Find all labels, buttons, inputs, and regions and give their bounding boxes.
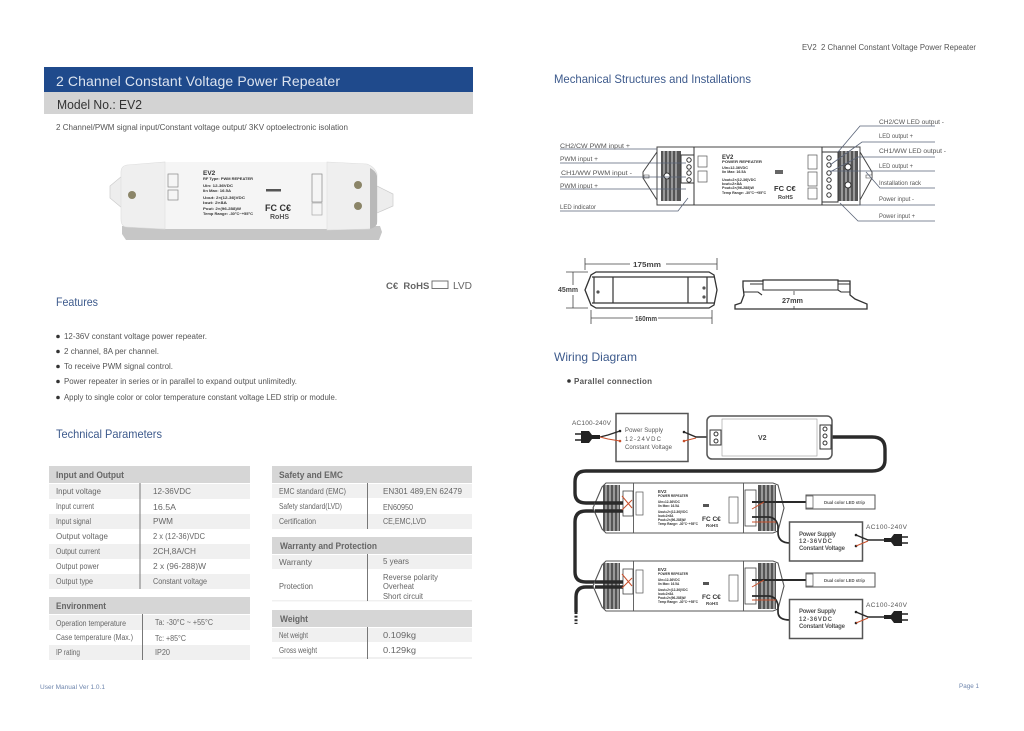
callout: LED indicator: LED indicator	[560, 204, 597, 211]
table: input and output	[49, 466, 250, 589]
certification marks: LVD	[453, 281, 472, 292]
table: input and output: Input signal	[56, 517, 91, 526]
product photo: Iin Max: 16.5A	[203, 189, 232, 193]
repeater: lower	[593, 561, 784, 611]
table: weight: Weight	[280, 614, 308, 624]
driver outline: POWER REPEATER	[722, 160, 763, 164]
repeater: upper: Temp Range: -30°C~+55°C	[658, 522, 699, 526]
table: input and output: Output voltage	[56, 532, 109, 541]
table: warranty and protection: 5 years	[383, 557, 409, 566]
heading: wiring diagram: Wiring Diagram	[554, 350, 637, 364]
table: input and output: Output current	[56, 547, 101, 556]
repeater: lower: Iin Max: 16.5A	[658, 582, 680, 586]
icon: power plug top left	[575, 431, 600, 443]
repeater: lower: RoHS	[706, 601, 718, 606]
diagram: top view dimensions: 45mm	[558, 285, 578, 294]
LED strip: lower	[806, 573, 875, 587]
LED output cables	[752, 502, 806, 580]
heading: technical parameters: Technical Parameters	[56, 427, 162, 441]
repeater: lower: POWER REPEATER	[658, 572, 689, 576]
repeater: upper: POWER REPEATER	[658, 494, 689, 498]
power supply: upper right: Constant Voltage	[799, 546, 846, 552]
table: safety and EMC: Safety standard(LVD)	[279, 502, 342, 511]
table: environment: Operation temperature	[56, 619, 126, 628]
AC label: lower right: AC100-240V	[866, 602, 908, 609]
table: warranty and protection	[272, 537, 472, 602]
callout: power input +: Power input +	[879, 213, 915, 220]
power supply: top: Power Supply	[625, 428, 663, 434]
repeater: lower: Temp Range: -30°C~+55°C	[658, 600, 699, 604]
footer: version: User Manual Ver 1.0.1	[40, 684, 105, 691]
product photo: Iout: 2×8A	[203, 201, 228, 205]
right callout lines	[830, 126, 935, 221]
table: environment: IP rating	[56, 648, 80, 657]
table: input and output: Input current	[56, 502, 95, 511]
title banner: 2 Channel Constant Voltage Power Repeater	[56, 73, 340, 89]
table: safety and EMC: CE,EMC,LVD	[383, 517, 426, 526]
product photo: Uin: 12-36VDC	[203, 184, 234, 188]
table: weight: 0.129kg	[383, 646, 416, 655]
driver outline: Iin Max: 16.5A	[722, 170, 747, 174]
features list	[56, 332, 337, 402]
diagram: side view dimensions	[735, 280, 867, 309]
repeater: lower: Uout=2×(12-36)VDC	[658, 588, 688, 592]
callout: LED output + second: LED output +	[879, 163, 913, 170]
features list: Apply to single color or color temperature constant voltage LED strip or module.	[64, 393, 337, 402]
table: warranty and protection: Overheat	[383, 582, 415, 591]
driver outline: Uout=2×(12-36)VDC	[722, 178, 757, 182]
input wire ends	[595, 503, 623, 587]
features list: 2 channel, 8A per channel.	[64, 347, 159, 356]
product photo: EV2	[203, 170, 216, 177]
red wires	[622, 496, 776, 600]
features list: To receive PWM signal control.	[64, 362, 173, 371]
power supply cables	[752, 517, 790, 620]
table: safety and EMC: EN301 489,EN 62479	[383, 487, 463, 496]
table: safety and EMC: EN60950	[383, 503, 413, 512]
table: safety and EMC	[272, 466, 472, 529]
icon: power plug lower right	[856, 611, 908, 623]
model number bar: Model No.: EV2	[57, 97, 142, 112]
repeater: upper: Uout=2×(12-36)VDC	[658, 510, 688, 514]
table: weight: Gross weight	[279, 646, 318, 655]
table: input and output: 16.5A	[153, 503, 177, 512]
power supply: upper right	[790, 522, 862, 561]
controller: V2	[707, 416, 832, 459]
diagram: top view dimensions	[558, 258, 717, 324]
table: environment: Environment	[56, 601, 106, 611]
callout: PWM input +: PWM input +	[560, 156, 598, 163]
callout: CH2/CW LED output -: CH2/CW LED output -	[879, 119, 944, 126]
power supply: top: 12-24VDC	[625, 437, 662, 443]
repeater: lower: EV2	[658, 567, 667, 572]
table: input and output: 12-36VDC	[153, 487, 191, 496]
features list: Power repeater in series or in parallel to expand output unlimitedly.	[64, 377, 297, 386]
footer: page number: Page 1	[959, 683, 979, 690]
power supply: lower right: Constant Voltage	[799, 624, 846, 630]
diagram: parallel wiring	[572, 414, 908, 638]
product photo: RF Type: PWM REPEATER	[203, 177, 254, 181]
LED strip: upper	[806, 495, 875, 509]
sub-heading: parallel connection: Parallel connection	[574, 377, 652, 386]
repeater: upper: Iout=2×8A	[658, 514, 674, 518]
table: input and output: Input voltage	[56, 487, 102, 496]
callout: CH2/CW PWM input +: CH2/CW PWM input +	[560, 143, 630, 150]
diagram: top view dimensions: 160mm	[635, 314, 657, 323]
table: input and output: 2CH,8A/CH	[153, 547, 196, 556]
table: environment: IP20	[155, 648, 170, 657]
table: input and output: 2 x (96-288)W	[153, 562, 206, 571]
table: input and output: PWM	[153, 517, 173, 526]
dashed continuation	[574, 612, 578, 624]
product photo: Uout: 2×(12-36)VDC	[203, 196, 246, 200]
repeater: lower: Iout=2×8A	[658, 592, 674, 596]
product photo: FC C€	[265, 203, 291, 213]
repeater: upper: FC C€	[702, 516, 721, 523]
repeater: lower: Pout=2×(96-288)W	[658, 596, 686, 600]
repeater: upper: Iin Max: 16.5A	[658, 504, 680, 508]
heading: features: Features	[56, 295, 98, 309]
table: warranty and protection: Warranty and Protection	[280, 541, 377, 551]
repeater: lower: FC C€	[702, 594, 721, 601]
driver outline: Temp Range: -30°C~+55°C	[722, 191, 767, 195]
power supply: lower right	[790, 600, 862, 638]
repeater: upper: RoHS	[706, 523, 718, 528]
repeater: upper: Uin=12-36VDC	[658, 500, 681, 504]
table: safety and EMC: Certification	[279, 517, 316, 526]
AC label: upper right: AC100-240V	[866, 524, 908, 531]
signal cables	[575, 437, 885, 612]
driver outline: Pout=2×(96-288)W	[722, 186, 754, 190]
power supply: lower right: Power Supply	[799, 609, 837, 615]
diagram: side view dimensions: 27mm	[782, 296, 803, 305]
repeater: lower: Uin=12-36VDC	[658, 578, 681, 582]
callout: LED output +: LED output +	[879, 133, 913, 140]
title banner	[44, 67, 473, 92]
table: input and output: Output power	[56, 562, 99, 571]
running header: EV2 2 Channel Constant Voltage Power Repeater	[802, 43, 976, 52]
driver outline: Uin=12-36VDC	[722, 166, 749, 170]
table: input and output: 2 x (12-36)VDC	[153, 532, 205, 541]
AC label: top left: AC100-240V	[572, 420, 612, 427]
table: warranty and protection: Short circuit	[383, 592, 424, 601]
repeater: upper	[593, 483, 784, 533]
heading: mechanical structures: Mechanical Structures and Installations	[554, 72, 751, 86]
driver outline	[643, 147, 872, 205]
product photo: Pout: 2×(96-288)W	[203, 207, 241, 211]
product photo	[110, 162, 393, 240]
callout: PWM input + second: PWM input +	[560, 183, 598, 190]
left callout lines	[560, 149, 688, 211]
table: warranty and protection: Reverse polarity	[383, 573, 438, 582]
table: safety and EMC: EMC standard (EMC)	[279, 487, 346, 496]
driver outline: EV2	[722, 155, 734, 161]
product photo: Temp Range: -30°C~+55°C	[203, 212, 254, 216]
table: environment	[49, 597, 250, 660]
table: input and output: Constant voltage	[153, 577, 207, 586]
table: input and output: Input and Output	[56, 470, 124, 480]
LED strip: upper: Dual color LED strip	[824, 500, 865, 505]
features list: 12-36V constant voltage power repeater.	[64, 332, 207, 341]
callout: power input -: Power input -	[879, 196, 914, 203]
table: environment: Case temperature (Max.)	[56, 633, 133, 642]
power supply: top: Constant Voltage	[625, 445, 673, 451]
model number bar	[44, 92, 473, 114]
power supply: upper right: Power Supply	[799, 532, 837, 538]
LED strip: lower: Dual color LED strip	[824, 578, 865, 583]
table: warranty and protection: Protection	[279, 582, 313, 591]
repeater: upper: EV2	[658, 489, 667, 494]
driver outline: Iout=2×8A	[722, 182, 743, 186]
product photo: RoHS	[270, 214, 289, 221]
power supply: top	[600, 414, 708, 462]
table: environment: Ta: -30°C ~ +55°C	[155, 618, 213, 627]
certification marks: C€ RoHS	[386, 281, 429, 292]
table: weight	[272, 610, 472, 659]
table: input and output: Output type	[56, 577, 93, 586]
controller: V2: V2	[758, 435, 767, 442]
callout: installation rack: Installation rack	[879, 180, 922, 187]
driver outline: FC C€	[774, 184, 796, 193]
power supply: upper right: 12-36VDC	[799, 539, 833, 545]
driver outline: RoHS	[778, 195, 793, 201]
subtitle: 2 Channel/PWM signal input/Constant voltage output/ 3KV optoelectronic isolation	[56, 123, 348, 132]
table: environment: Tc: +85°C	[155, 634, 186, 643]
callout: CH1/WW PWM input -: CH1/WW PWM input -	[561, 170, 632, 177]
power supply: lower right: 12-36VDC	[799, 617, 833, 623]
table: weight: 0.109kg	[383, 631, 416, 640]
diagram: top view dimensions: 175mm	[633, 260, 661, 269]
repeater: upper: Pout=2×(96-288)W	[658, 518, 686, 522]
table: warranty and protection: Warranty	[279, 558, 312, 567]
diagram: mechanical structure with callouts	[560, 119, 946, 221]
table: safety and EMC: Safety and EMC	[279, 470, 343, 480]
icon: power plug upper right	[856, 534, 908, 546]
callout: CH1/WW LED output -: CH1/WW LED output -	[879, 148, 946, 155]
table: weight: Net weight	[279, 631, 309, 640]
certification marks	[386, 281, 472, 292]
